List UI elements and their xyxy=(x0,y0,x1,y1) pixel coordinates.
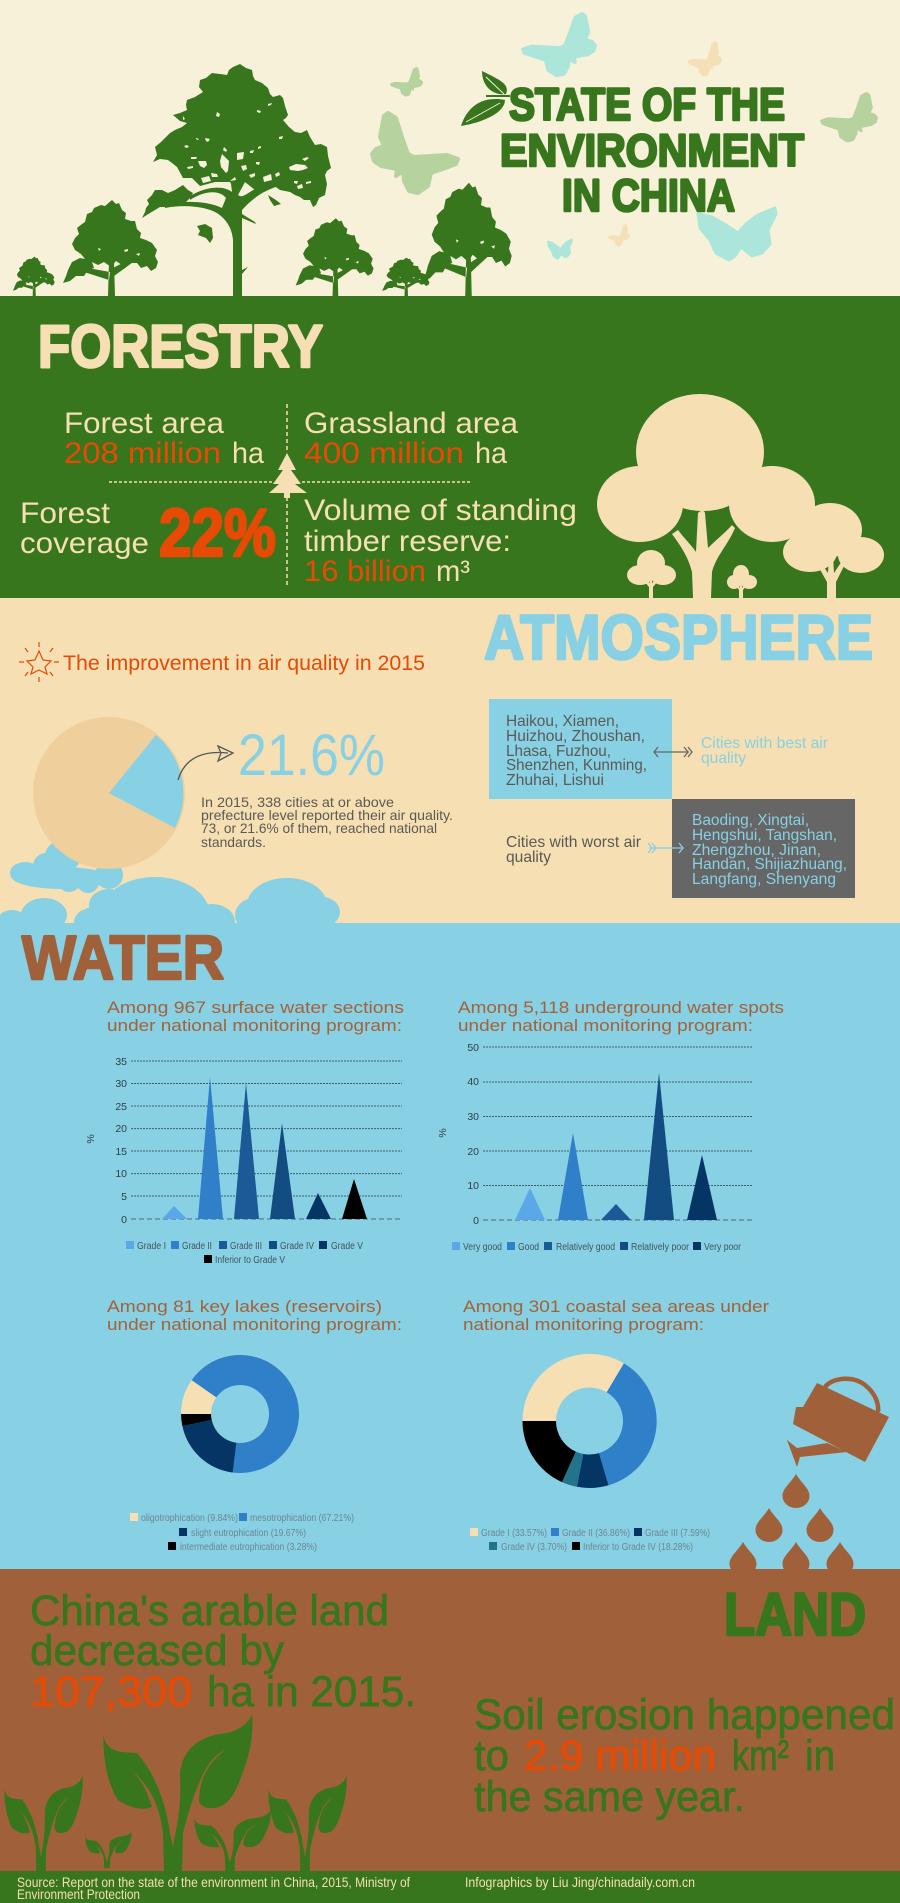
box: best cities xyxy=(489,699,672,799)
legend: surface water: Grade III xyxy=(230,1241,262,1252)
legend: coastal sea: Grade I (33.57%) xyxy=(481,1528,547,1539)
legend: lakes: oligotrophication (9.84%) xyxy=(141,1513,238,1524)
box: best cities: Haikou, Xiamen, xyxy=(506,713,619,730)
label: best air quality xyxy=(701,735,829,767)
box: worst cities: Zhengzhou, Jinan, xyxy=(692,842,821,859)
icon: butterfly sage small xyxy=(391,68,422,96)
source credit xyxy=(17,1874,410,1902)
illustration: middle sprout xyxy=(194,1810,271,1872)
stat: timber reserve xyxy=(304,494,577,588)
text block: soil erosion: Soil erosion happened xyxy=(474,1691,895,1739)
donut chart: lakes xyxy=(181,1355,299,1473)
text block: soil erosion: km² xyxy=(732,1732,789,1780)
heading: water: WATER xyxy=(22,924,224,993)
chart title: coastal sea xyxy=(463,1298,770,1334)
chart title: underground water xyxy=(458,999,784,1035)
stat: forest coverage xyxy=(20,495,276,571)
chart: surface water grades: 15 xyxy=(115,1146,127,1158)
pie chart: air quality xyxy=(33,717,185,869)
icon: star xyxy=(19,642,59,682)
text block: air quality description: standards. xyxy=(201,834,266,850)
text block: arable land: 107,300 xyxy=(30,1668,192,1716)
legend: lakes: slight eutrophication (19.67%) xyxy=(191,1528,306,1539)
legend: coastal sea xyxy=(470,1528,710,1553)
panel: water xyxy=(0,923,900,1576)
panel: header xyxy=(0,0,900,296)
chart: underground water quality: 30 xyxy=(467,1111,479,1123)
source credit: Environment Protection xyxy=(17,1886,140,1902)
legend: lakes: intermediate eutrophication (3.28%) xyxy=(180,1542,317,1553)
legend: underground water: Relatively poor xyxy=(631,1242,690,1253)
legend: surface water: Grade IV xyxy=(280,1241,314,1252)
legend: underground water: Very good xyxy=(463,1242,502,1253)
icon: watering can xyxy=(787,1379,889,1467)
heading: land: LAND xyxy=(724,1581,866,1648)
subheading: air quality improvement: The improvement in air quality in 2015 xyxy=(63,652,425,675)
illustration: small tree B xyxy=(63,200,158,296)
arrow: to best cities xyxy=(654,747,692,757)
text block: air quality description xyxy=(201,794,453,850)
chart title: underground water: Among 5,118 underground water spots xyxy=(458,999,784,1017)
text block: arable land: ha in 2015. xyxy=(207,1668,416,1716)
text block: soil erosion: to xyxy=(474,1732,509,1780)
stat: grassland area: ha xyxy=(475,437,507,470)
source credit: Source: Report on the state of the environment in China, 2015, Ministry of xyxy=(17,1874,410,1890)
title: IN CHINA xyxy=(562,170,735,221)
illustration: small tree A xyxy=(13,257,55,296)
chart: surface water grades: 35 xyxy=(115,1056,127,1068)
illustration: small tree C xyxy=(296,218,374,296)
chart title: coastal sea: Among 301 coastal sea areas under xyxy=(463,1298,770,1316)
legend: coastal sea: Inferior to Grade IV (18.28%) xyxy=(583,1542,693,1553)
chart: surface water grades: 10 xyxy=(115,1168,127,1180)
chart title: surface water: Among 967 surface water sections xyxy=(107,999,404,1017)
chart: surface water grades: 25 xyxy=(115,1101,127,1113)
legend: surface water: Grade I xyxy=(137,1241,166,1252)
legend: surface water: Grade V xyxy=(331,1241,363,1252)
label: worst air quality xyxy=(506,834,642,866)
text block: arable land: decreased by xyxy=(30,1627,284,1675)
icon: butterfly teal bottom xyxy=(698,208,776,260)
stat: timber reserve: 16 billion xyxy=(304,555,426,588)
stat: timber reserve: timber reserve: xyxy=(304,525,511,558)
box: worst cities: Handan, Shijiazhuang, xyxy=(692,856,847,873)
illustration: cream trees xyxy=(597,394,884,598)
panel: footer xyxy=(0,1871,900,1903)
icon: small pine tree xyxy=(269,453,307,498)
icon: butterfly teal large xyxy=(523,14,595,76)
stat: forest area: 208 million xyxy=(64,437,221,470)
icon: butterfly sage large xyxy=(372,113,458,193)
title: STATE OF THE xyxy=(509,79,785,130)
chart title: underground water: under national monitoring program: xyxy=(458,1017,753,1035)
chart: underground water quality xyxy=(437,1042,753,1227)
chart: surface water grades: 20 xyxy=(115,1123,127,1135)
stat: forest coverage: 22% xyxy=(159,495,276,571)
chart title: lakes xyxy=(107,1298,402,1334)
illustration: tiny sprout xyxy=(85,1832,132,1868)
label: best air quality: quality xyxy=(701,750,746,767)
legend: lakes: mesotrophication (67.21%) xyxy=(250,1513,354,1524)
text block: arable land xyxy=(30,1587,416,1716)
chart title: surface water: under national monitoring program: xyxy=(107,1017,402,1035)
text block: arable land: China's arable land xyxy=(30,1587,389,1635)
chart: underground water quality: 0 xyxy=(473,1215,479,1227)
stat: forest coverage: Forest xyxy=(20,497,111,530)
stat: 21.6%: 21.6% xyxy=(238,723,385,788)
text block: soil erosion: in xyxy=(805,1732,835,1780)
stat: grassland area xyxy=(304,407,518,470)
box: best cities: Lhasa, Fuzhou, xyxy=(506,743,611,760)
panel: land xyxy=(0,1569,900,1872)
arrow: to worst cities xyxy=(648,843,683,853)
box: best cities: Zhuhai, Lishui xyxy=(506,772,604,789)
stat: grassland area: 400 million xyxy=(304,437,464,470)
chart: surface water grades xyxy=(85,1056,402,1226)
legend: surface water: Grade II xyxy=(182,1241,212,1252)
chart title: lakes: Among 81 key lakes (reservoirs) xyxy=(107,1298,382,1316)
icon: butterfly peach small xyxy=(609,225,630,246)
panel: atmosphere xyxy=(0,598,900,953)
arrow: pie to percent xyxy=(178,746,233,780)
chart: underground water quality: 20 xyxy=(467,1146,479,1158)
illustration: small tree D xyxy=(382,258,430,296)
stat: forest area: ha xyxy=(232,437,264,470)
label: worst air quality: quality xyxy=(506,849,551,866)
box: worst cities: Hengshui, Tangshan, xyxy=(692,827,837,844)
legend: coastal sea: Grade II (36.86%) xyxy=(562,1528,630,1539)
chart title: lakes: under national monitoring program: xyxy=(107,1316,402,1334)
heading: forestry: FORESTRY xyxy=(38,313,323,380)
text block: air quality description: In 2015, 338 cities at or above xyxy=(201,794,394,810)
box: worst cities: Baoding, Xingtai, xyxy=(692,812,809,829)
stat: grassland area: Grassland area xyxy=(304,407,518,440)
legend: surface water xyxy=(126,1241,363,1266)
legend: surface water: Inferior to Grade V xyxy=(215,1255,285,1266)
stat: forest area xyxy=(64,407,264,470)
donut chart: coastal sea xyxy=(522,1354,657,1488)
text block: soil erosion xyxy=(474,1691,895,1821)
chart: underground water quality: % xyxy=(437,1128,449,1138)
label: worst air quality: Cities with worst air xyxy=(506,834,642,851)
author credit: Infographics by Liu Jing/chinadaily.com.cn xyxy=(465,1874,695,1890)
legend: underground water: Very poor xyxy=(704,1242,742,1253)
chart: surface water grades: 5 xyxy=(121,1191,127,1203)
legend: underground water xyxy=(452,1242,742,1253)
stat: forest coverage: coverage xyxy=(20,527,149,560)
icon: title leaves xyxy=(461,71,510,126)
box: worst cities: Langfang, Shenyang xyxy=(692,871,836,888)
illustration: large clouds xyxy=(0,877,340,953)
icon: butterfly peach xyxy=(689,42,721,76)
icon: butterfly sage right xyxy=(821,93,877,141)
chart title: surface water xyxy=(107,999,404,1035)
chart title: coastal sea: national monitoring program: xyxy=(463,1316,704,1334)
legend: lakes xyxy=(130,1513,354,1553)
illustration: small tree E xyxy=(423,183,512,296)
chart: surface water grades: 30 xyxy=(115,1078,127,1090)
box: best cities: Huizhou, Zhoushan, xyxy=(506,728,645,745)
box: best cities: Shenzhen, Kunming, xyxy=(506,757,647,774)
legend: underground water: Relatively good xyxy=(556,1242,615,1253)
illustration: right sprout xyxy=(268,1776,347,1872)
panel: forestry xyxy=(0,296,900,598)
stat: forest area: Forest area xyxy=(64,407,224,440)
icon: water drops xyxy=(730,1474,854,1576)
illustration: large tree xyxy=(142,64,331,296)
box: worst cities xyxy=(672,799,855,898)
legend: coastal sea: Grade III (7.59%) xyxy=(645,1528,710,1539)
text block: soil erosion: 2.9 million xyxy=(524,1732,716,1780)
legend: underground water: Good xyxy=(518,1242,539,1253)
icon: butterfly teal small xyxy=(548,239,572,259)
legend: coastal sea: Grade IV (3.70%) xyxy=(501,1542,567,1553)
text block: air quality description: 73, or 21.6% of them, reached national xyxy=(201,820,437,836)
chart: underground water quality: 10 xyxy=(467,1180,479,1192)
illustration: big sprout xyxy=(103,1714,252,1872)
text block: soil erosion: the same year. xyxy=(474,1773,745,1821)
text block: air quality description: prefecture level reported their air quality. xyxy=(201,807,453,823)
chart: underground water quality: 40 xyxy=(467,1076,479,1088)
title xyxy=(500,79,804,221)
label: best air quality: Cities with best air xyxy=(701,735,829,752)
illustration: small cloud xyxy=(10,840,123,893)
stat: timber reserve: m³ xyxy=(436,555,470,588)
chart: surface water grades: 0 xyxy=(121,1214,127,1226)
illustration: left sprout xyxy=(4,1776,83,1872)
chart: underground water quality: 50 xyxy=(467,1042,479,1054)
stat: timber reserve: Volume of standing xyxy=(304,494,577,527)
chart: surface water grades: % xyxy=(85,1134,97,1144)
title: ENVIRONMENT xyxy=(500,125,804,176)
